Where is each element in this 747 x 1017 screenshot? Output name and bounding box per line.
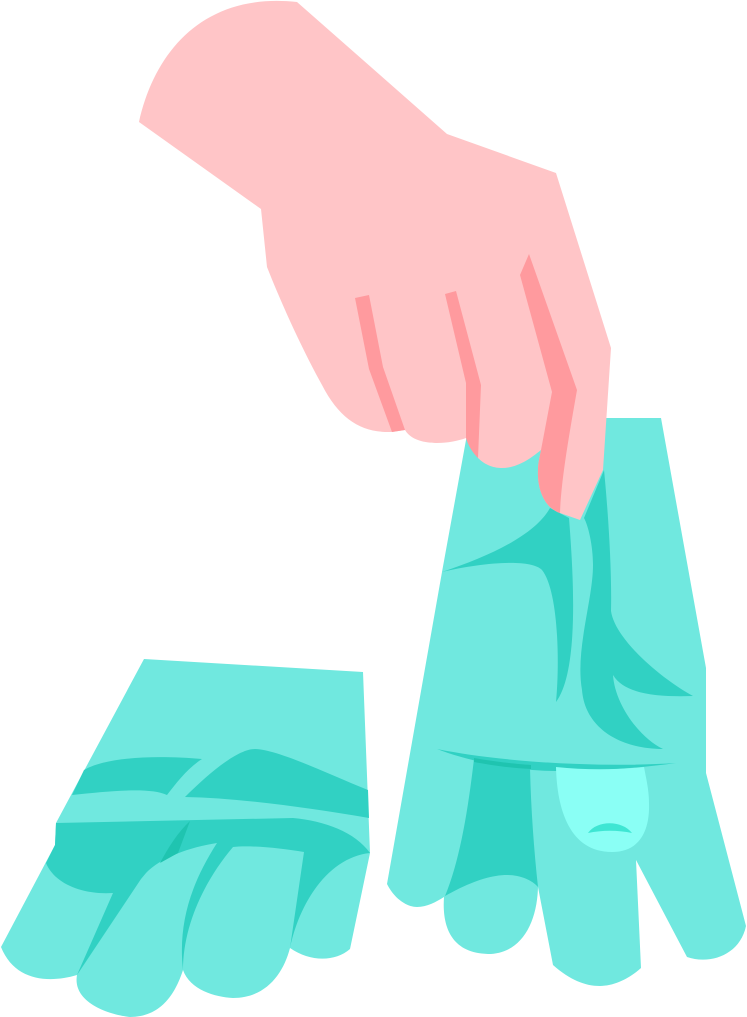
nail crease bbox=[588, 823, 632, 833]
hand bbox=[139, 1, 611, 520]
right glove inner finger shadow bbox=[445, 759, 538, 896]
right glove held by the hand bbox=[387, 418, 746, 986]
left glove body bbox=[1, 659, 370, 1017]
knuckle shadow three bbox=[520, 254, 577, 513]
left glove lying down bbox=[1, 659, 370, 1017]
fingernail bbox=[556, 767, 649, 852]
left glove lower fold bbox=[46, 818, 370, 975]
right glove body bbox=[387, 418, 746, 986]
right glove fold shadows bbox=[442, 508, 573, 702]
knuckle shadow one bbox=[355, 295, 405, 432]
hand silhouette bbox=[139, 1, 611, 520]
knuckle shadow two bbox=[445, 291, 481, 458]
right glove cuff fold bbox=[437, 749, 676, 771]
left glove top folds bbox=[72, 757, 202, 795]
